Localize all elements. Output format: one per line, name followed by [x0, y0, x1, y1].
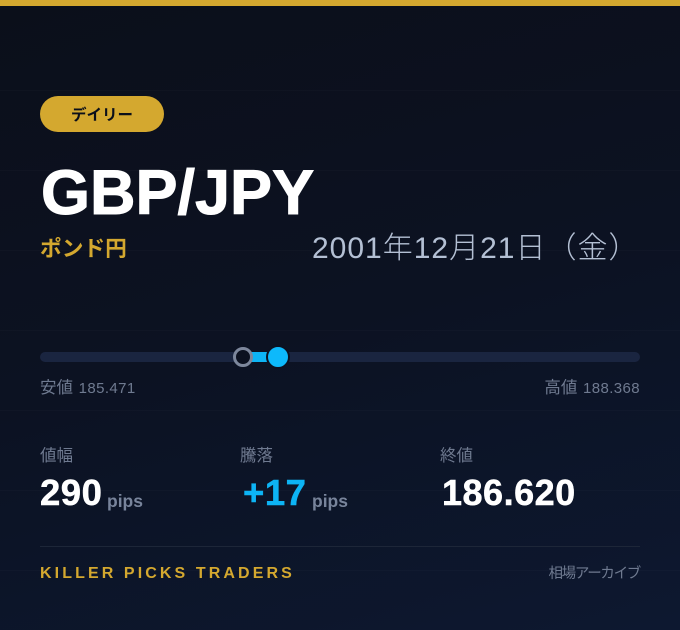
- stat label: 値幅: [40, 447, 73, 465]
- badge: daily: デイリー: [71, 107, 133, 124]
- stat unit: pips: [312, 491, 348, 511]
- stat label: 終値: [440, 447, 473, 465]
- marker: open price: [233, 347, 253, 367]
- date: 2001年12月21日（金）: [312, 232, 639, 265]
- stat value: 186.620: [442, 472, 576, 513]
- slider fill: open to close: [243, 352, 278, 362]
- title: currency pair: GBP/JPY: [41, 158, 314, 228]
- high price label: 高値 188.368: [544, 379, 640, 397]
- range slider chart: [40, 347, 640, 367]
- stat unit: pips: [107, 491, 143, 511]
- stat: close: [440, 446, 576, 513]
- marker: close price: [266, 345, 290, 369]
- top accent bar: [0, 0, 680, 6]
- badge: daily: [40, 96, 164, 132]
- stat: range: [40, 446, 143, 513]
- stat: change: [240, 446, 348, 513]
- subtitle: pair name in Japanese: ポンド円: [40, 236, 127, 261]
- footer archive label: 相場アーカイブ: [548, 566, 640, 582]
- stat value: +17: [243, 472, 306, 513]
- stat value: 290: [40, 472, 102, 513]
- footer brand: KILLER PICKS TRADERS: [40, 565, 295, 582]
- stat label: 騰落: [240, 447, 273, 465]
- low price label: 安値 185.471: [40, 379, 136, 397]
- slider track: [40, 352, 640, 362]
